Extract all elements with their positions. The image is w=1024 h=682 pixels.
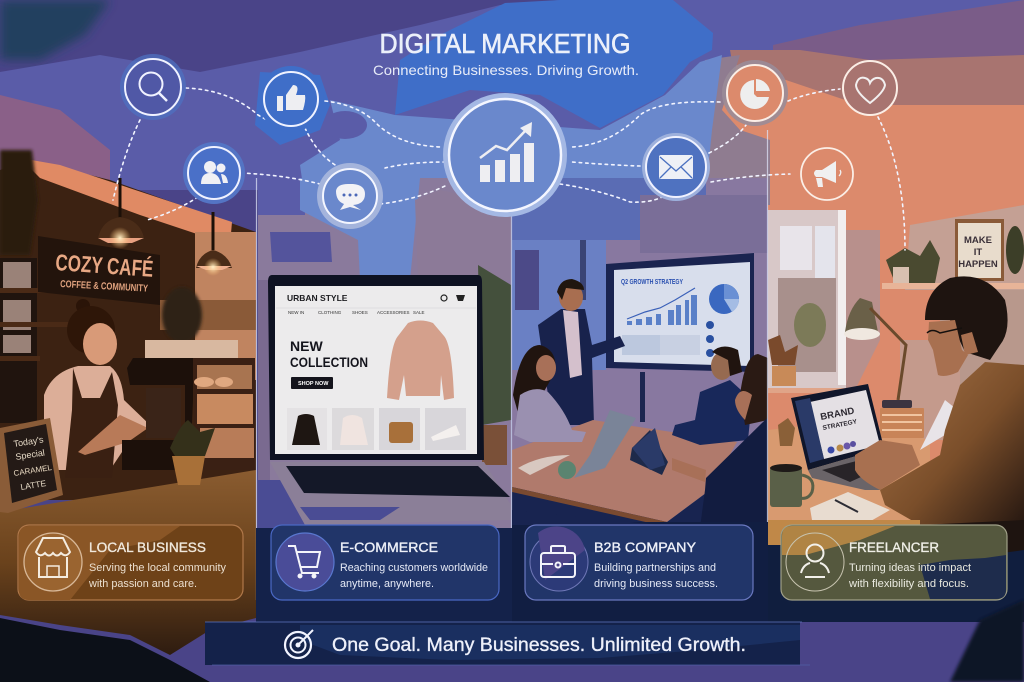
- laptop with store: URBAN STYLE: [287, 293, 348, 303]
- laptop with store: NEW IN: [288, 310, 304, 315]
- card: b2b company: B2B COMPANY: [594, 540, 696, 555]
- panel: freelancer scene: [768, 205, 1024, 528]
- desk lamp and books: [844, 298, 924, 438]
- chalkboard: Special: [15, 447, 45, 462]
- card: freelancer: Turning ideas into impact: [849, 562, 971, 574]
- icon: envelope: [642, 133, 710, 201]
- icon: megaphone: [801, 148, 853, 200]
- icon: storefront: [24, 533, 82, 591]
- growth strategy screen: Q2 GROWTH STRATEGY: [621, 277, 683, 286]
- chalkboard: Today's: [13, 434, 45, 449]
- panel: B2B scene: [512, 178, 768, 528]
- presenter: [538, 279, 625, 425]
- panel: cafe scene: [0, 150, 256, 655]
- card: b2b company: driving business success.: [594, 578, 718, 590]
- card: e-commerce: [271, 525, 499, 600]
- growth strategy screen: [606, 253, 754, 372]
- icon: hanging lamps: [98, 178, 232, 276]
- icon: chat: [317, 163, 383, 229]
- chalkboard: CARAMEL: [13, 463, 53, 478]
- connection lines: [113, 88, 905, 250]
- laptop with store: CLOTHING: [318, 310, 342, 315]
- icon: target: [285, 630, 313, 658]
- chalkboard: [0, 418, 63, 513]
- icon: person: [786, 533, 844, 591]
- card: freelancer: with flexibility and focus.: [848, 578, 969, 590]
- laptop: brand strategy: [791, 384, 912, 490]
- window: [768, 210, 846, 388]
- card: b2b company: [525, 525, 753, 600]
- laptop with store: SHOES: [352, 310, 368, 315]
- card: e-commerce: Reaching customers worldwide: [340, 562, 488, 574]
- plant: [170, 420, 215, 485]
- laptop with store: NEW: [290, 338, 323, 354]
- card: b2b company: Building partnerships and: [594, 562, 716, 574]
- card: e-commerce: anytime, anywhere.: [340, 578, 434, 590]
- barista: [44, 299, 150, 478]
- freelancer person: [855, 276, 1024, 528]
- card: local business: Serving the local community: [89, 562, 227, 574]
- card: local business: [18, 525, 243, 600]
- subtitle: Connecting Businesses. Driving Growth.: [373, 62, 639, 78]
- icon: like: [258, 66, 324, 132]
- card: local business: with passion and care.: [88, 578, 197, 590]
- card: local business: LOCAL BUSINESS: [89, 540, 206, 555]
- laptop with store: SALE: [413, 310, 425, 315]
- tagline: One Goal. Many Businesses. Unlimited Growth.: [332, 635, 746, 656]
- footer band: [205, 622, 810, 665]
- desk: [768, 420, 930, 528]
- team at table: [512, 345, 768, 528]
- icon: briefcase: [530, 526, 588, 591]
- panel: e-commerce scene: [258, 178, 511, 528]
- icon: shopping cart: [276, 533, 334, 591]
- hoodie: [387, 320, 454, 400]
- icon: search: [120, 54, 186, 120]
- mug and notebook: [770, 464, 890, 526]
- keyboard base: [270, 462, 511, 525]
- sign: cozy cafe: COFFEE & COMMUNITY: [60, 279, 149, 295]
- title: DIGITAL MARKETING: [380, 28, 630, 59]
- chalkboard: LATTE: [20, 478, 47, 492]
- card: freelancer: [781, 525, 1007, 600]
- sign: cozy cafe: [38, 236, 160, 305]
- icon: pie chart: [722, 60, 788, 126]
- icon: heart: [843, 61, 897, 115]
- laptop: brand strategy: STRATEGY: [822, 418, 858, 432]
- poster: make it happen: HAPPEN: [958, 259, 998, 270]
- poster: make it happen: [955, 219, 1004, 281]
- espresso machine and pastry case: [122, 340, 255, 470]
- small plant: [778, 418, 795, 446]
- poster: make it happen: MAKE: [964, 235, 992, 246]
- card: freelancer: FREELANCER: [849, 540, 939, 555]
- icon: growth chart hub: [443, 93, 567, 217]
- card: e-commerce: E-COMMERCE: [340, 540, 438, 555]
- laptop with store: COLLECTION: [290, 354, 368, 370]
- counter: [0, 470, 256, 655]
- icon: people: [183, 142, 245, 204]
- laptop with store: SHOP NOW: [298, 381, 329, 387]
- laptop: brand strategy: BRAND: [819, 406, 855, 423]
- bottom dark area: [0, 510, 1024, 682]
- laptop with store: [268, 275, 511, 525]
- shelf and plants: [768, 226, 1024, 393]
- sign: cozy cafe: COZY CAFÉ: [55, 248, 154, 282]
- laptop with store: ACCESSORIES: [377, 310, 410, 315]
- scene dividers: [256, 130, 768, 610]
- poster: make it happen: IT: [974, 247, 982, 258]
